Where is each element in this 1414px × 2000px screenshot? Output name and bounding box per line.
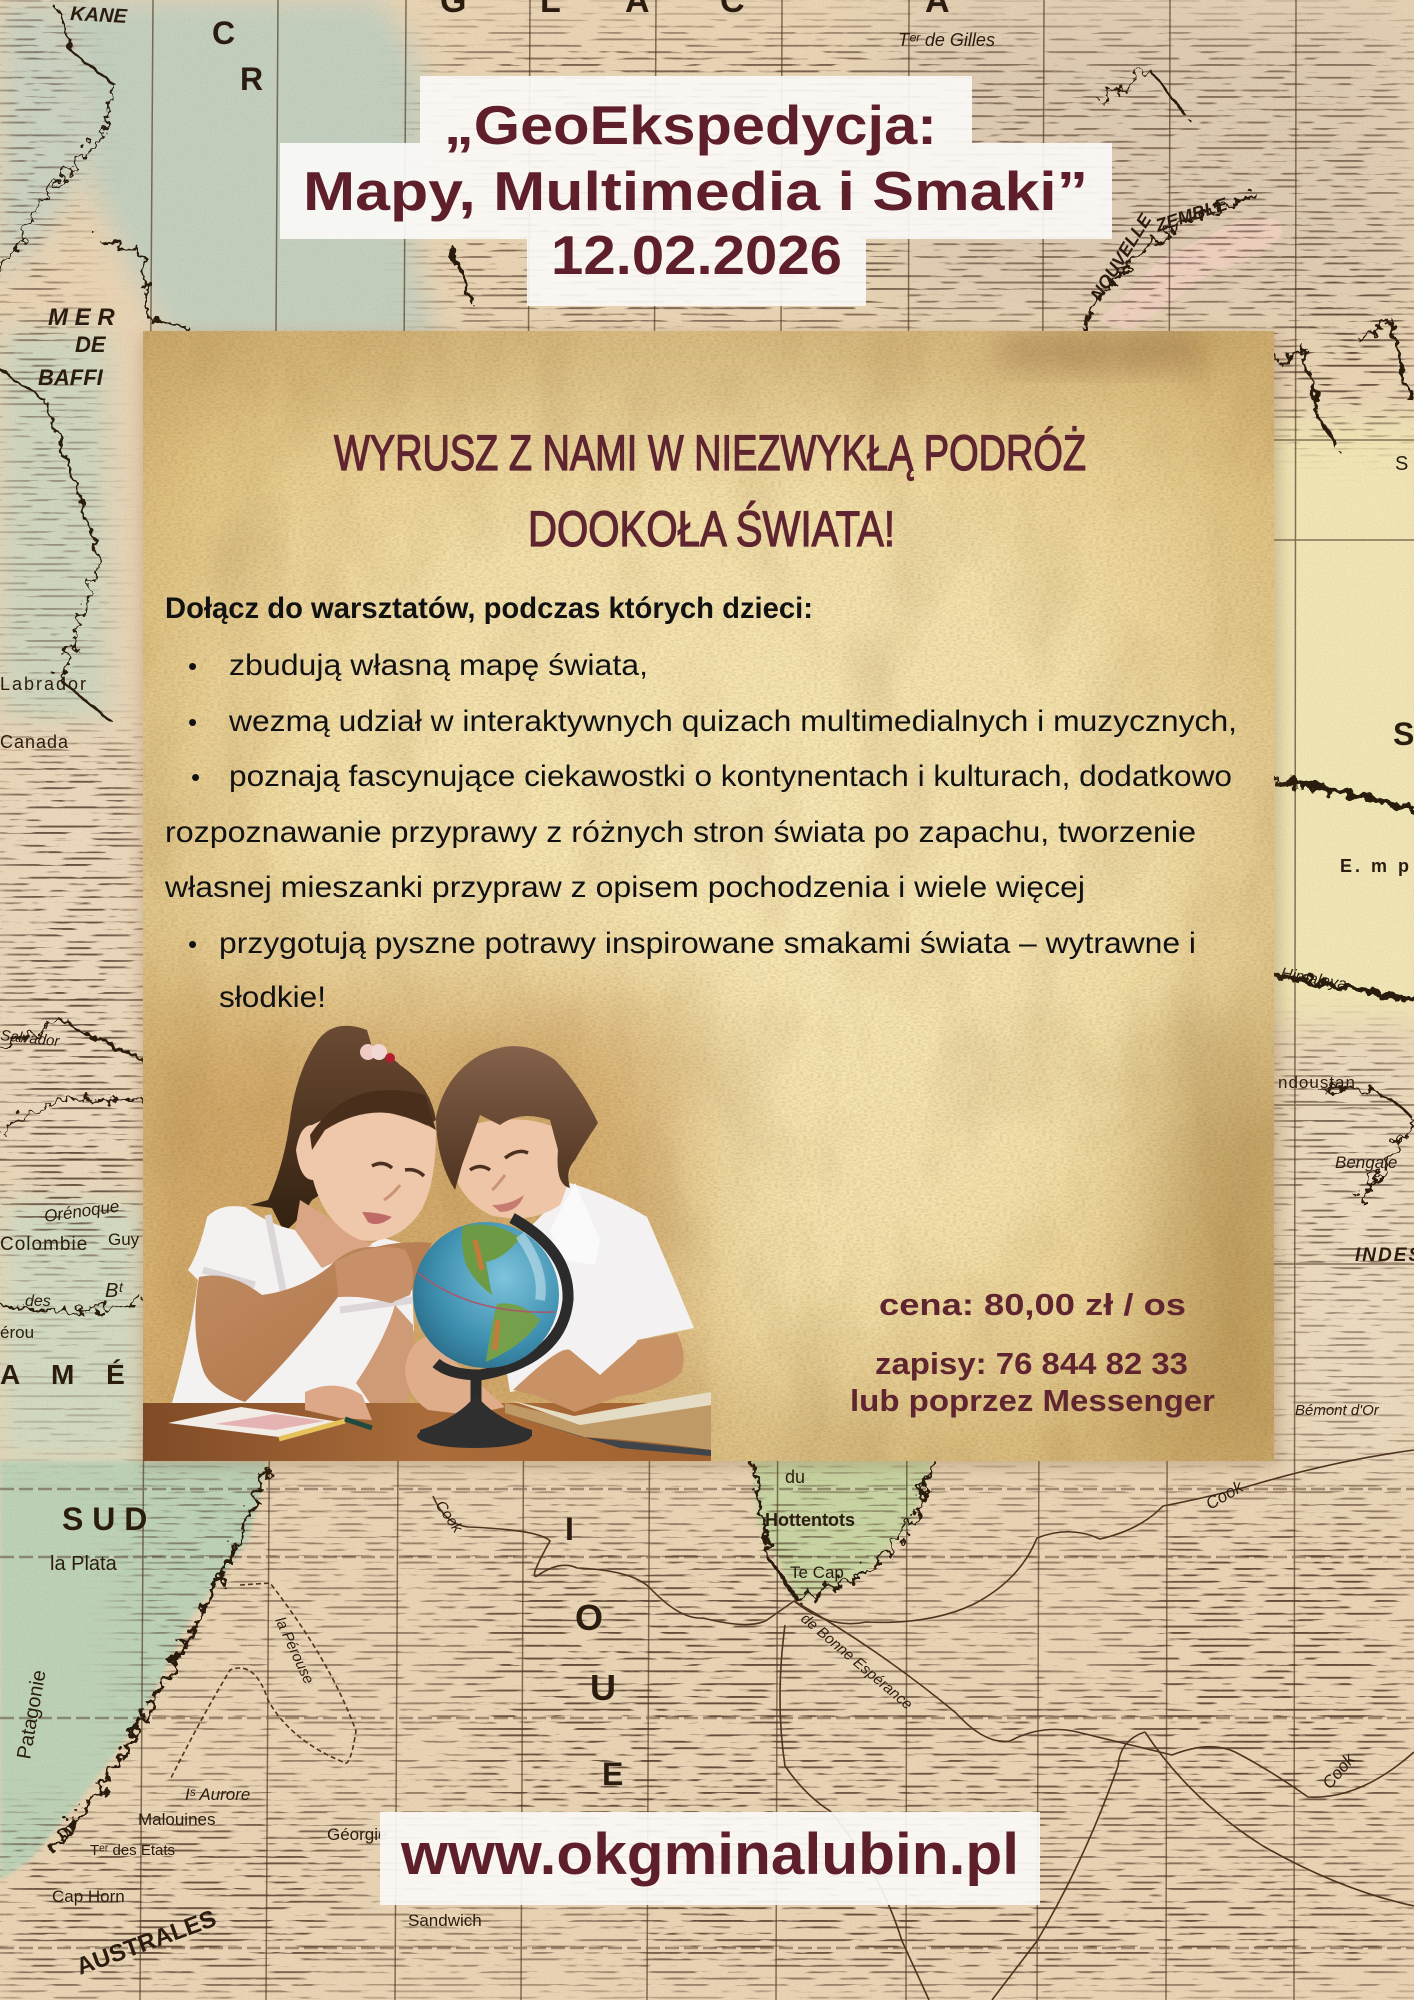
map labels: Géorgie (327, 1825, 387, 1844)
map labels: E (602, 1756, 623, 1792)
map labels: Cap Horn (52, 1887, 125, 1906)
map labels: ZEMBLE (1152, 194, 1231, 236)
map labels: Colombie (0, 1234, 88, 1255)
map labels: du (785, 1467, 805, 1487)
website: www.okgminalubin.pl (400, 1822, 1019, 1887)
map labels: Iˢ Aurore (185, 1785, 250, 1804)
workshop description: słodkie! (219, 981, 326, 1014)
nova zemlya (1100, 218, 1282, 330)
map labels: Bémont d'Or (1295, 1402, 1380, 1419)
girl: hand on table (305, 1386, 372, 1420)
map labels: Tᵉʳ de Gilles (898, 30, 995, 50)
map labels: R (240, 61, 263, 97)
yellow land east (1260, 420, 1414, 1020)
map labels: AUSTRALES (73, 1905, 220, 1981)
map labels: NOUVELLE (1086, 210, 1156, 304)
sea tint: north (60, 0, 440, 340)
table (143, 1403, 711, 1461)
map labels: KANE (70, 3, 128, 28)
girl: face (296, 1111, 436, 1241)
website box (380, 1812, 1040, 1905)
girl: hand on globe (335, 1247, 413, 1303)
workshop description: przygotują pyszne potrawy inspirowane smakami świata – wytrawne i (219, 927, 1196, 960)
globe stand (436, 1218, 568, 1412)
map labels: Orénoque (43, 1197, 120, 1226)
map labels: Cook (1319, 1749, 1360, 1793)
panel heading: DOOKOŁA ŚWIATA! (528, 500, 895, 557)
open book (505, 1393, 711, 1450)
map labels: ndoustan (1278, 1073, 1356, 1092)
notebook and pencil (168, 1407, 372, 1439)
map labels: des (25, 1293, 51, 1310)
illustration: children with globe (143, 1026, 711, 1461)
map labels: Bengale (1335, 1153, 1397, 1172)
map labels: Cook (1202, 1476, 1248, 1513)
map labels: Bᵗ (105, 1280, 123, 1302)
girl: ponytail and back hair (250, 1026, 436, 1232)
workshop description: rozpoznawanie przyprawy z różnych stron świata po zapachu, tworzenie (165, 816, 1196, 849)
girl: left arm (356, 1305, 414, 1403)
title box: line 1 (420, 76, 972, 143)
boy: arms (405, 1337, 505, 1415)
panel shadow (143, 336, 1279, 1466)
map labels: A M É R (0, 1359, 189, 1390)
map labels: U (590, 1667, 616, 1708)
map labels: DE (75, 332, 107, 357)
map labels: Te Cap (790, 1563, 844, 1582)
map labels: C (212, 15, 235, 51)
workshop description: Dołącz do warsztatów, podczas których dzieci: (165, 592, 813, 625)
girl: shirt (172, 1206, 414, 1403)
girl: neck (295, 1200, 372, 1268)
map labels: de Bonne Espérance (797, 1610, 916, 1713)
workshop description (164, 592, 1237, 1014)
map labels: Cook (432, 1498, 467, 1537)
map labels: BAFFI (38, 365, 104, 390)
land tint: africa (753, 1461, 933, 1601)
voyage routes (170, 1450, 1414, 2000)
sign-up details: lub poprzez Messenger (850, 1383, 1215, 1418)
girl: pointing arm (195, 1242, 432, 1402)
globe base (417, 1395, 532, 1448)
panel heading: WYRUSZ Z NAMI W NIEZWYKŁĄ PODRÓŻ (334, 425, 1086, 481)
map labels: Guy (108, 1230, 140, 1249)
map labels: Malouines (138, 1810, 216, 1829)
workshop description: wezmą udział w interaktywnych quizach multimedialnych i muzycznych, (228, 705, 1237, 738)
workshop description: własnej mieszanki przypraw z opisem pochodzenia i wiele więcej (164, 871, 1085, 904)
land tint: south america (0, 1461, 268, 1880)
map labels: la Plata (50, 1553, 118, 1575)
map labels: la Pérouse (271, 1615, 317, 1687)
map labels: Patagonie (13, 1668, 51, 1761)
boy: hair (436, 1046, 598, 1190)
title: „GeoEkspedycja: (444, 94, 937, 156)
map labels: Himalaya (1279, 965, 1348, 994)
workshop description: • (188, 929, 197, 959)
map labels: I (565, 1511, 574, 1547)
title box: line 3 (527, 239, 866, 306)
map labels: M E R (48, 304, 115, 331)
map labels: Canada (0, 732, 69, 752)
boy: shirt (500, 1183, 694, 1392)
title: Mapy, Multimedia i Smaki” (303, 160, 1088, 222)
map labels: S (1393, 716, 1414, 752)
workshop description: • (191, 762, 200, 792)
title (303, 94, 1088, 286)
map labels: Labrador (0, 674, 88, 694)
land tint: left edge (0, 330, 110, 720)
workshop description: • (188, 707, 197, 737)
workshop description: poznają fascynujące ciekawostki o kontynentach i kulturach, dodatkowo (229, 760, 1232, 793)
sign-up details: zapisy: 76 844 82 33 (875, 1346, 1188, 1381)
map labels: O (575, 1597, 603, 1638)
panel: workshop card (100, 300, 1300, 1480)
map labels: Tᵉʳ des Etats (90, 1842, 175, 1859)
boy: face (454, 1119, 571, 1218)
map labels: S (1395, 453, 1408, 475)
map labels: érou (0, 1323, 34, 1342)
price: cena: 80,00 zł / os (879, 1287, 1186, 1322)
map labels: Hottentots (765, 1510, 855, 1530)
map labels: Sandwich (408, 1911, 482, 1930)
workshop description: • (188, 651, 197, 681)
map labels: S U D (62, 1501, 147, 1537)
title box: line 2 (280, 143, 1112, 239)
girl: scrunchie (360, 1044, 395, 1063)
map labels: E. m p (1340, 856, 1412, 876)
globe (413, 1222, 559, 1368)
map labels: Salvador (0, 1027, 61, 1050)
title: 12.02.2026 (551, 224, 842, 286)
sign-up details (850, 1346, 1215, 1418)
workshop description: zbudują własną mapę świata, (229, 649, 648, 682)
panel heading (334, 425, 1086, 557)
